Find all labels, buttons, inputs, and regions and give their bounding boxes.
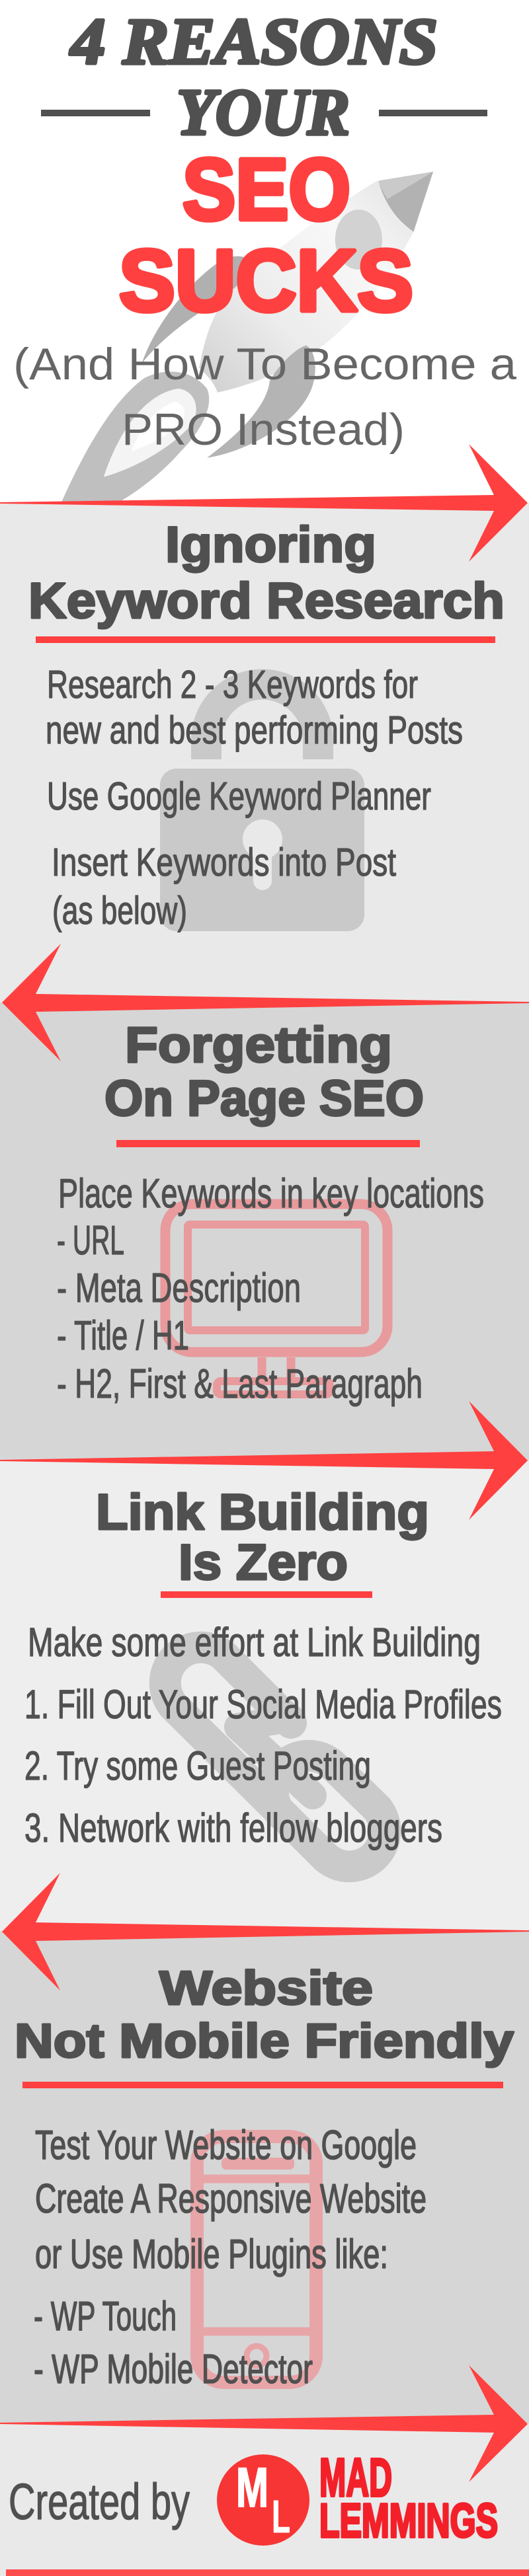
body text: - Title / H1 <box>57 1313 189 1359</box>
title line: 4 reasons: 4 REASONS <box>69 5 438 78</box>
body text <box>57 1171 484 1407</box>
heading: Not Mobile Friendly <box>15 2015 514 2068</box>
arrow: left one <box>2 944 529 1061</box>
heading <box>104 1017 424 1127</box>
heading <box>28 517 505 629</box>
panel: link building is zero <box>0 1460 529 1932</box>
body text: - WP Touch <box>34 2294 177 2339</box>
subtitle line two: PRO Instead) <box>122 404 405 455</box>
icon: monitor <box>165 1204 387 1394</box>
logo: mad lemmings: L <box>272 2491 290 2542</box>
icon: smartphone <box>197 2137 316 2382</box>
title line: seo: SEO <box>183 141 350 238</box>
body text: - URL <box>57 1218 124 1264</box>
heading: Link Building <box>96 1484 429 1540</box>
body text: Insert Keywords into Post <box>52 841 396 884</box>
body text: or Use Mobile Plugins like: <box>35 2232 388 2277</box>
body text: Research 2 - 3 Keywords for <box>47 663 418 706</box>
subtitle line one: (And How To Become a <box>13 339 516 389</box>
body text <box>34 2123 427 2392</box>
heading: On Page SEO <box>104 1071 424 1127</box>
logo: mad lemmings: M <box>236 2456 268 2519</box>
rule: left of your <box>41 110 150 116</box>
footer rule <box>6 2569 529 2576</box>
heading <box>96 1484 429 1591</box>
rule: right of your <box>379 110 487 116</box>
panel: website not mobile friendly <box>0 1931 529 2424</box>
heading underline <box>161 1591 372 1598</box>
panel: header <box>13 5 516 528</box>
title line: sucks: SUCKS <box>119 232 413 329</box>
arrow: left two <box>2 1873 529 1990</box>
heading underline <box>116 1140 420 1147</box>
icon: chain link <box>165 1648 385 1866</box>
heading underline <box>22 2082 503 2088</box>
title line: your: YOUR <box>177 75 350 149</box>
arrow: right two <box>0 1401 528 1520</box>
body text: (as below) <box>52 889 187 932</box>
logo: mad lemmings: MAD <box>319 2448 392 2508</box>
body text: - WP Mobile Detector <box>34 2347 313 2392</box>
arrow: right one <box>0 444 528 562</box>
heading: Forgetting <box>125 1017 392 1073</box>
icon: padlock <box>160 685 364 931</box>
panel: footer credit <box>0 2423 529 2576</box>
heading: Keyword Research <box>28 573 505 629</box>
heading: Is Zero <box>179 1534 348 1591</box>
heading <box>15 1962 514 2068</box>
icon: rocket <box>50 172 433 528</box>
created by label: Created by <box>9 2474 190 2530</box>
body text <box>24 1620 502 1850</box>
body text: - Meta Description <box>57 1266 301 1311</box>
logo: mad lemmings <box>217 2448 498 2548</box>
body text <box>46 663 463 932</box>
heading underline <box>36 636 495 643</box>
heading: Ignoring <box>165 517 376 573</box>
panel: ignoring keyword research <box>0 503 529 1003</box>
panel: forgetting on page seo <box>0 1003 529 1461</box>
body text: 2. Try some Guest Posting <box>24 1743 371 1788</box>
arrow: right three <box>0 2365 528 2482</box>
heading: Website <box>159 1962 373 2015</box>
